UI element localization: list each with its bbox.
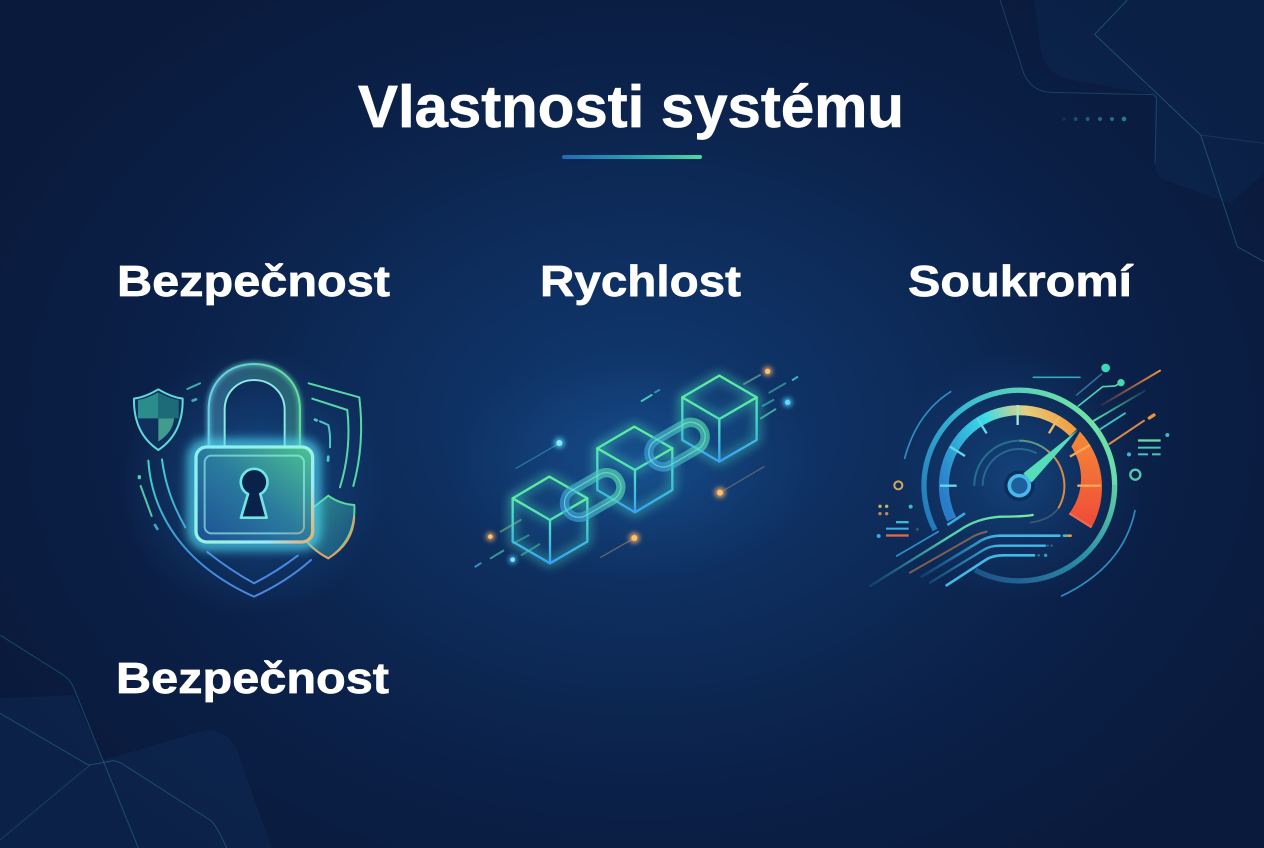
decoration: bottom left geometric shapes (0, 635, 272, 848)
icon: speedometer gauge (870, 350, 1169, 603)
cube 2 (597, 427, 672, 512)
title: Vlastnosti systému (358, 74, 904, 140)
heading: Bezpečnost: Bezpečnost (117, 257, 390, 306)
speed swooshes (870, 515, 1071, 586)
title underline (562, 155, 702, 159)
lock body (196, 447, 313, 542)
side motion arcs (139, 383, 361, 529)
large shield outline (148, 459, 311, 597)
shackle (209, 364, 300, 447)
heading: Rychlost: Rychlost (540, 257, 741, 306)
chain link 1 (559, 467, 626, 523)
chain link 2 (644, 417, 710, 472)
speed streaks (475, 375, 797, 567)
gauge ticks (940, 405, 1101, 527)
upper right speed lines (1033, 364, 1160, 444)
small shield left (134, 389, 183, 450)
keyhole (241, 469, 267, 518)
heading: Soukromí: Soukromí (908, 257, 1134, 306)
gauge band (944, 410, 1073, 519)
cube 1 (513, 477, 587, 563)
small shield right (307, 496, 354, 558)
left data marks (877, 481, 919, 538)
glowing particles (486, 367, 792, 564)
outer accent arcs (905, 392, 1135, 596)
icon: blockchain cubes and links (447, 353, 820, 580)
gauge red zone (1069, 432, 1102, 527)
inner arcs (974, 441, 1064, 523)
outer ring (924, 390, 1115, 581)
cube glow layer (513, 376, 757, 563)
bottom label: Bezpečnost: Bezpečnost (116, 654, 389, 703)
icon: padlock with shields (120, 350, 387, 617)
cube 3 (682, 376, 757, 462)
right data marks (1127, 433, 1169, 480)
lock body glow (193, 445, 315, 544)
needle (1004, 429, 1078, 501)
band end line (947, 513, 965, 525)
decoration: top right geometric shapes (1000, 0, 1264, 262)
